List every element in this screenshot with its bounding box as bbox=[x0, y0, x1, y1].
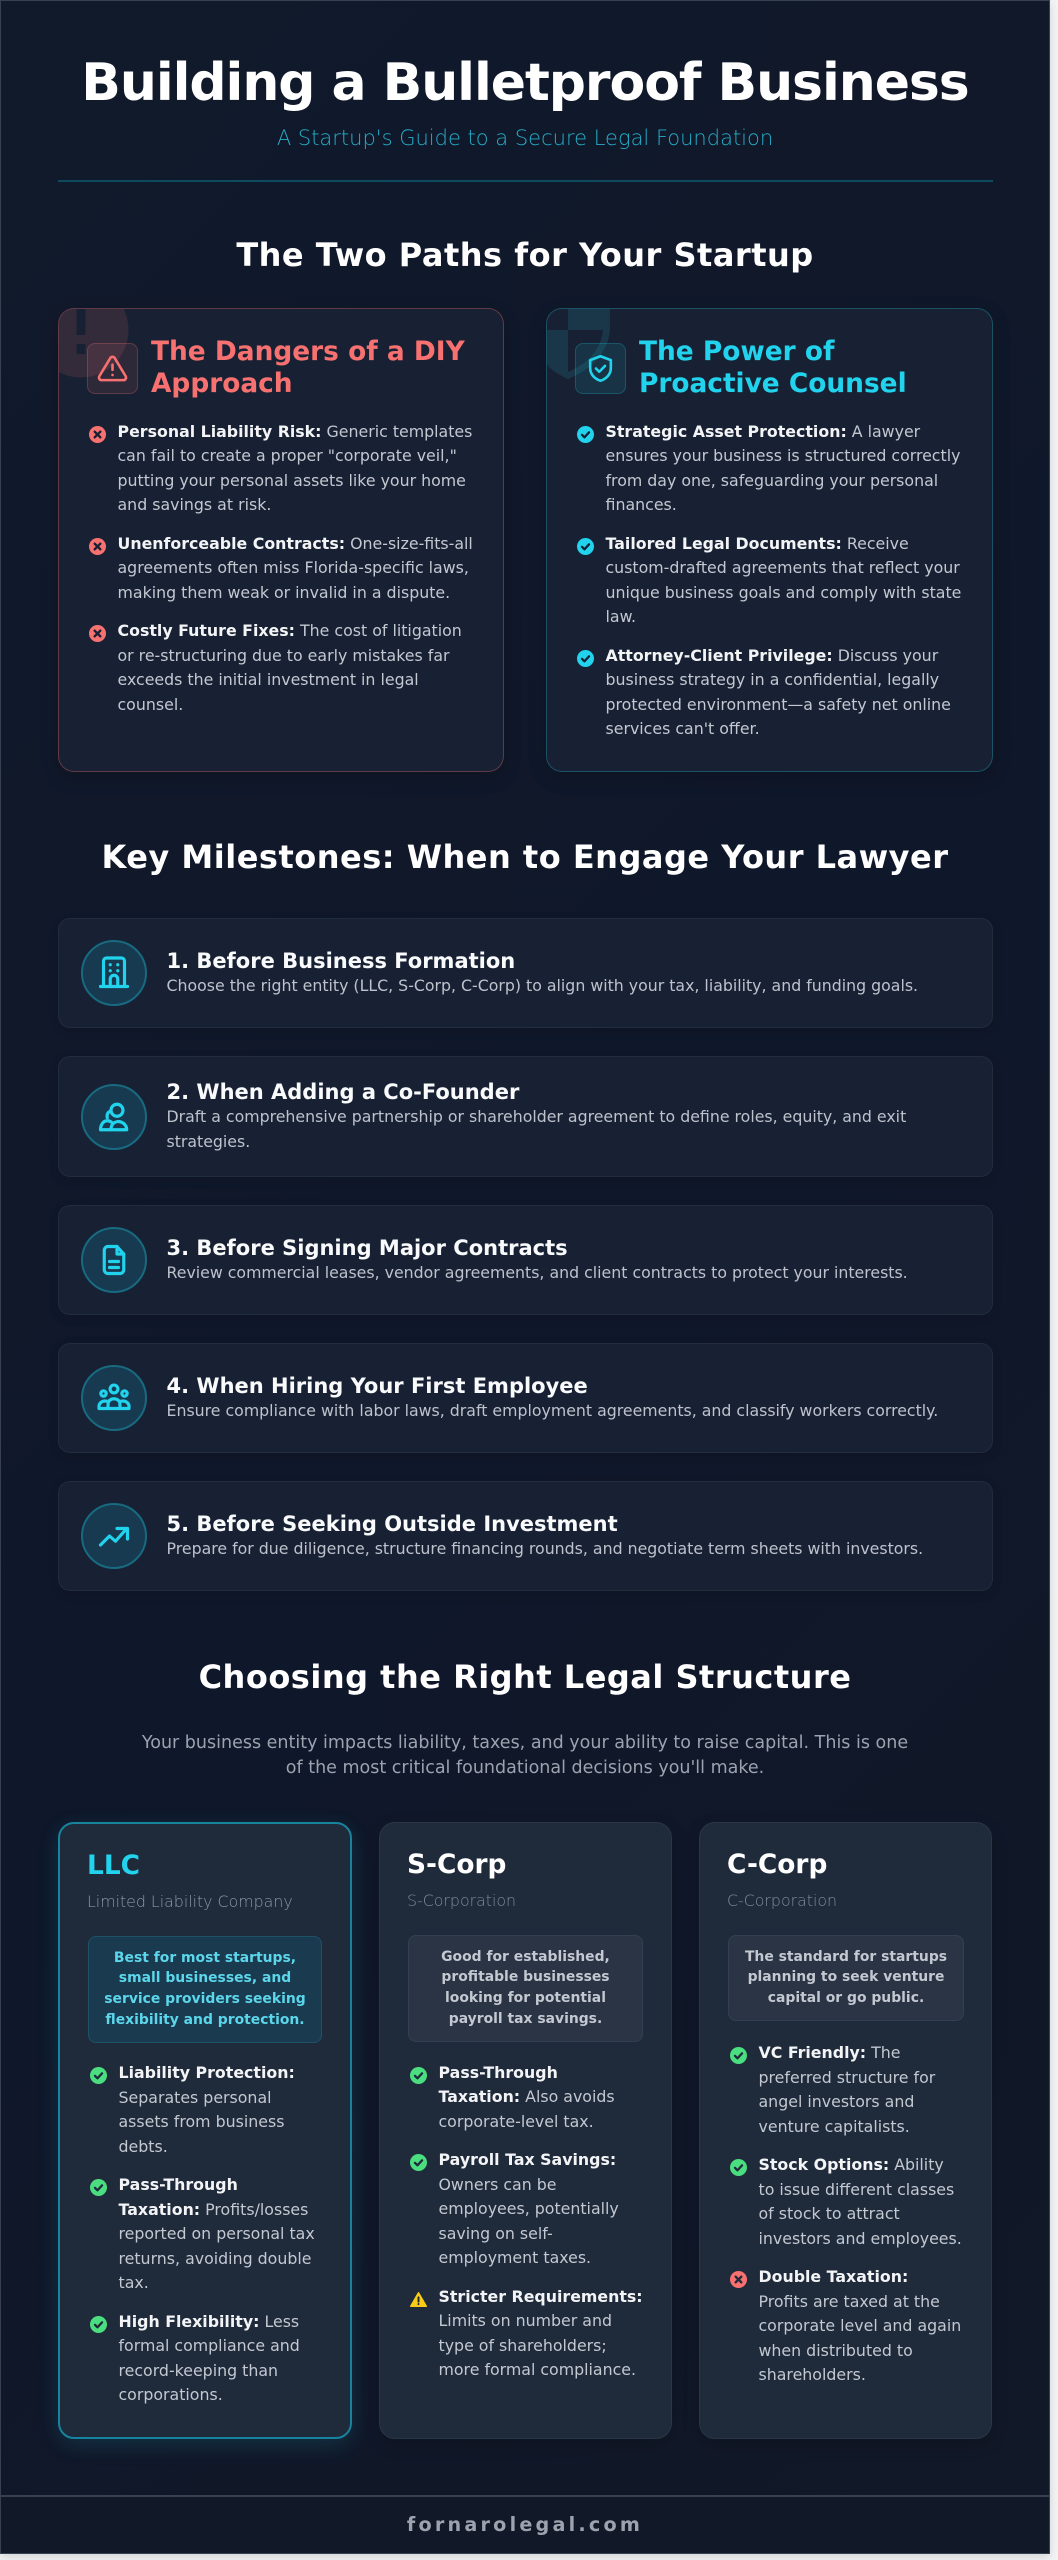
icon: shield check bbox=[575, 343, 626, 394]
item: high flexibility: record-keeping than bbox=[118, 2360, 278, 2380]
item: high flexibility: corporations. bbox=[118, 2385, 223, 2404]
item: liability protection: Separates personal bbox=[118, 2088, 272, 2106]
S-Corp best-for callout bbox=[408, 1935, 643, 2042]
icon: warning triangle bbox=[87, 343, 138, 394]
item: asset protection: from day one, safeguarding your personal bbox=[606, 470, 938, 490]
LLC best-for callout: Best for most startups, bbox=[114, 1950, 296, 1966]
milestone description: strategies. bbox=[166, 1132, 250, 1150]
item: personal liability: putting your personal assets like your home bbox=[118, 470, 466, 490]
C-Corp full name: C-Corporation bbox=[727, 1891, 837, 1910]
item: pass-through taxation: returns, avoiding double bbox=[118, 2248, 311, 2268]
watermark: exclamation circle bbox=[59, 309, 128, 378]
item: personal liability: and savings at risk. bbox=[118, 495, 271, 514]
item: payroll tax savings: employment taxes. bbox=[438, 2248, 591, 2267]
item: double taxation bbox=[730, 2267, 961, 2384]
milestone title: 2. When Adding a Co-Founder bbox=[166, 1080, 519, 1104]
panel: proactive counsel bbox=[546, 308, 993, 772]
item: payroll tax savings: saving on self- bbox=[438, 2224, 553, 2242]
item: pass-through taxation bbox=[410, 2062, 615, 2130]
milestone description: Ensure compliance with labor laws, draft employment agreements, and classify workers correctly. bbox=[166, 1401, 938, 1420]
icon: document bbox=[81, 1227, 147, 1293]
item: pass-through taxation: Taxation: Also avoids bbox=[438, 2087, 615, 2106]
LLC best-for callout: small businesses, and bbox=[119, 1970, 291, 1986]
item: asset protection bbox=[577, 422, 960, 514]
item: costly fixes bbox=[89, 621, 462, 714]
item: stock options: investors and employees. bbox=[758, 2228, 962, 2248]
item: personal liability: can fail to create a proper "corporate veil," bbox=[118, 446, 457, 465]
item: asset protection: finances. bbox=[606, 495, 677, 514]
subtitle: A Startup's Guide to a Secure Legal Foundation bbox=[277, 126, 773, 150]
item: personal liability: Personal Liability Risk: Generic templates bbox=[118, 422, 472, 440]
item: attorney-client privilege: protected environment—a safety net online bbox=[606, 694, 951, 714]
title: Building a Bulletproof Business bbox=[81, 53, 969, 113]
item: stock options bbox=[730, 2155, 962, 2248]
item: tailored documents: custom-drafted agreements that reflect your bbox=[606, 558, 960, 577]
LLC feature list bbox=[90, 2063, 315, 2404]
heading: legal structure: Choosing the Right Legal Structure bbox=[199, 1658, 851, 1696]
panel heading bbox=[151, 336, 465, 398]
footer website: fornarolegal.com bbox=[407, 2513, 643, 2536]
item: double taxation: Double Taxation: bbox=[758, 2267, 908, 2286]
milestone 2 bbox=[58, 1056, 993, 1177]
item: VC friendly: VC Friendly: The bbox=[758, 2043, 901, 2062]
S-Corp best-for callout: profitable businesses bbox=[441, 1969, 610, 1985]
intro paragraph bbox=[142, 1733, 908, 1778]
LLC full name: Limited Liability Company bbox=[87, 1892, 293, 1911]
card: LLC bbox=[58, 1822, 352, 2439]
S-Corp feature list bbox=[410, 2062, 643, 2379]
item: liability protection: debts. bbox=[118, 2136, 168, 2156]
panel heading bbox=[639, 336, 907, 398]
item: high flexibility bbox=[90, 2312, 300, 2404]
footer bbox=[0, 2495, 1050, 2555]
item: double taxation: Profits are taxed at the bbox=[758, 2292, 940, 2310]
heading: key milestones: Key Milestones: When to Engage Your Lawyer bbox=[101, 838, 949, 876]
item: VC friendly: venture capitalists. bbox=[758, 2116, 910, 2136]
panel heading: Proactive Counsel bbox=[639, 368, 907, 398]
card: C-Corp bbox=[699, 1822, 992, 2439]
item: costly fixes: Costly Future Fixes: The cost of litigation bbox=[118, 621, 462, 640]
item: asset protection: ensures your business is structured correctly bbox=[606, 446, 960, 465]
item: tailored documents: law. bbox=[606, 607, 636, 626]
milestone title: 3. Before Signing Major Contracts bbox=[166, 1236, 568, 1260]
item: pass-through taxation: corporate-level tax. bbox=[438, 2112, 594, 2130]
item: pass-through taxation bbox=[90, 2175, 315, 2292]
panel heading: The Dangers of a DIY bbox=[151, 336, 465, 367]
item: stricter requirements bbox=[410, 2286, 643, 2379]
item: payroll tax savings bbox=[410, 2150, 619, 2267]
C-Corp feature list bbox=[730, 2043, 962, 2384]
item: stock options: of stock to attract bbox=[758, 2204, 900, 2223]
item: VC friendly: preferred structure for bbox=[758, 2068, 935, 2086]
item: unenforceable contracts bbox=[89, 534, 473, 602]
intro paragraph: Your business entity impacts liability, taxes, and your ability to raise capital. This is one bbox=[142, 1733, 908, 1753]
S-Corp best-for callout: looking for potential bbox=[445, 1990, 606, 2006]
milestone description: Choose the right entity (LLC, S-Corp, C-Corp) to align with your tax, liability, and funding goals. bbox=[166, 976, 918, 995]
header rule bbox=[58, 180, 993, 182]
milestone title: 4. When Hiring Your First Employee bbox=[166, 1374, 588, 1398]
LLC name: LLC bbox=[87, 1850, 140, 1881]
item: payroll tax savings: Owners can be bbox=[438, 2174, 556, 2194]
S-Corp best-for callout: Good for established, bbox=[441, 1948, 610, 1964]
item: liability protection: assets from business bbox=[118, 2112, 284, 2131]
item: payroll tax savings: employees, potentially bbox=[438, 2199, 619, 2218]
item: stock options: Stock Options: Ability bbox=[758, 2155, 944, 2174]
watermark: shield bbox=[547, 309, 610, 379]
item: attorney-client privilege bbox=[577, 646, 951, 738]
item: costly fixes: counsel. bbox=[118, 694, 183, 714]
item: payroll tax savings: Payroll Tax Savings: bbox=[438, 2150, 616, 2169]
item: tailored documents: unique business goals and comply with state bbox=[606, 582, 961, 602]
C-Corp best-for callout: The standard for startups bbox=[745, 1948, 947, 1964]
C-Corp best-for callout bbox=[728, 1935, 964, 2021]
item: attorney-client privilege: services can't offer. bbox=[606, 719, 760, 738]
milestone 1 bbox=[58, 918, 993, 1028]
item: asset protection: Strategic Asset Protection: A lawyer bbox=[606, 422, 920, 440]
icon: co-founder bbox=[81, 1084, 147, 1150]
milestone title: 5. Before Seeking Outside Investment bbox=[166, 1512, 618, 1536]
item: pass-through taxation: Pass-Through bbox=[438, 2062, 558, 2082]
LLC best-for callout bbox=[88, 1936, 322, 2043]
item: liability protection: Liability Protection: bbox=[118, 2063, 295, 2082]
item: liability protection bbox=[90, 2063, 295, 2156]
milestone description: Draft a comprehensive partnership or shareholder agreement to define roles, equity, and exit bbox=[166, 1107, 906, 1126]
item: unenforceable contracts: agreements often miss Florida-specific laws, bbox=[118, 558, 469, 577]
icon: trending up bbox=[81, 1503, 147, 1569]
S-Corp full name: S-Corporation bbox=[407, 1891, 516, 1910]
item: double taxation: when distributed to bbox=[758, 2340, 913, 2360]
item: tailored documents bbox=[577, 534, 961, 626]
panel: dangers of DIY bbox=[58, 308, 504, 772]
item: unenforceable contracts: Unenforceable Contracts: One-size-fits-all bbox=[118, 534, 473, 552]
item: costly fixes: or re-structuring due to early mistakes far bbox=[118, 646, 450, 664]
benefit list bbox=[577, 422, 961, 738]
item: stricter requirements: more formal compliance. bbox=[438, 2360, 636, 2379]
item: double taxation: shareholders. bbox=[758, 2365, 866, 2384]
C-Corp best-for callout: planning to seek venture bbox=[748, 1969, 944, 1985]
panel heading: The Power of bbox=[639, 336, 834, 367]
LLC best-for callout: flexibility and protection. bbox=[105, 2012, 305, 2028]
item: stock options: to issue different classes bbox=[758, 2180, 954, 2198]
S-Corp name: S-Corp bbox=[407, 1849, 506, 1880]
item: stricter requirements: Stricter Requirements: bbox=[438, 2286, 643, 2306]
S-Corp best-for callout: payroll tax savings. bbox=[449, 2011, 602, 2027]
item: VC friendly: angel investors and bbox=[758, 2092, 914, 2111]
item: unenforceable contracts: making them weak or invalid in a dispute. bbox=[118, 582, 450, 602]
item: personal liability bbox=[89, 422, 472, 514]
milestone 5 bbox=[58, 1481, 993, 1591]
item: attorney-client privilege: Attorney-Client Privilege: Discuss your bbox=[606, 646, 938, 664]
icon: team bbox=[81, 1365, 147, 1431]
item: stricter requirements: type of shareholders; bbox=[438, 2336, 607, 2354]
item: high flexibility: formal compliance and bbox=[118, 2336, 300, 2355]
item: pass-through taxation: tax. bbox=[118, 2273, 149, 2292]
item: high flexibility: High Flexibility: Less bbox=[118, 2312, 299, 2330]
C-Corp name: C-Corp bbox=[727, 1849, 827, 1880]
milestone 4 bbox=[58, 1343, 993, 1453]
milestone description bbox=[166, 1107, 906, 1150]
item: pass-through taxation: Pass-Through bbox=[118, 2175, 238, 2194]
icon: building bbox=[81, 940, 147, 1006]
milestone description: Review commercial leases, vendor agreements, and client contracts to protect your interests. bbox=[166, 1263, 908, 1282]
LLC best-for callout: service providers seeking bbox=[104, 1991, 306, 2007]
item: double taxation: corporate level and again bbox=[758, 2316, 961, 2335]
intro paragraph: of the most critical foundational decisions you'll make. bbox=[286, 1758, 764, 1778]
milestone title: 1. Before Business Formation bbox=[166, 949, 515, 973]
item: costly fixes: exceeds the initial investment in legal bbox=[118, 670, 419, 689]
item: pass-through taxation: reported on personal tax bbox=[118, 2224, 315, 2243]
C-Corp best-for callout: capital or go public. bbox=[768, 1990, 924, 2006]
heading: two paths: The Two Paths for Your Startup bbox=[236, 236, 814, 274]
item: tailored documents: Tailored Legal Documents: Receive bbox=[606, 534, 909, 552]
item: stricter requirements: Limits on number and bbox=[438, 2311, 612, 2330]
item: VC friendly bbox=[730, 2043, 936, 2136]
item: attorney-client privilege: business strategy in a confidential, legally bbox=[606, 670, 939, 689]
item: pass-through taxation: Taxation: Profits/losses bbox=[118, 2200, 308, 2218]
panel heading: Approach bbox=[151, 368, 293, 398]
milestone description: Prepare for due diligence, structure financing rounds, and negotiate term sheets with investors. bbox=[166, 1539, 923, 1558]
milestone 3 bbox=[58, 1205, 993, 1315]
card: S-Corp bbox=[379, 1822, 672, 2439]
danger list bbox=[89, 422, 473, 714]
